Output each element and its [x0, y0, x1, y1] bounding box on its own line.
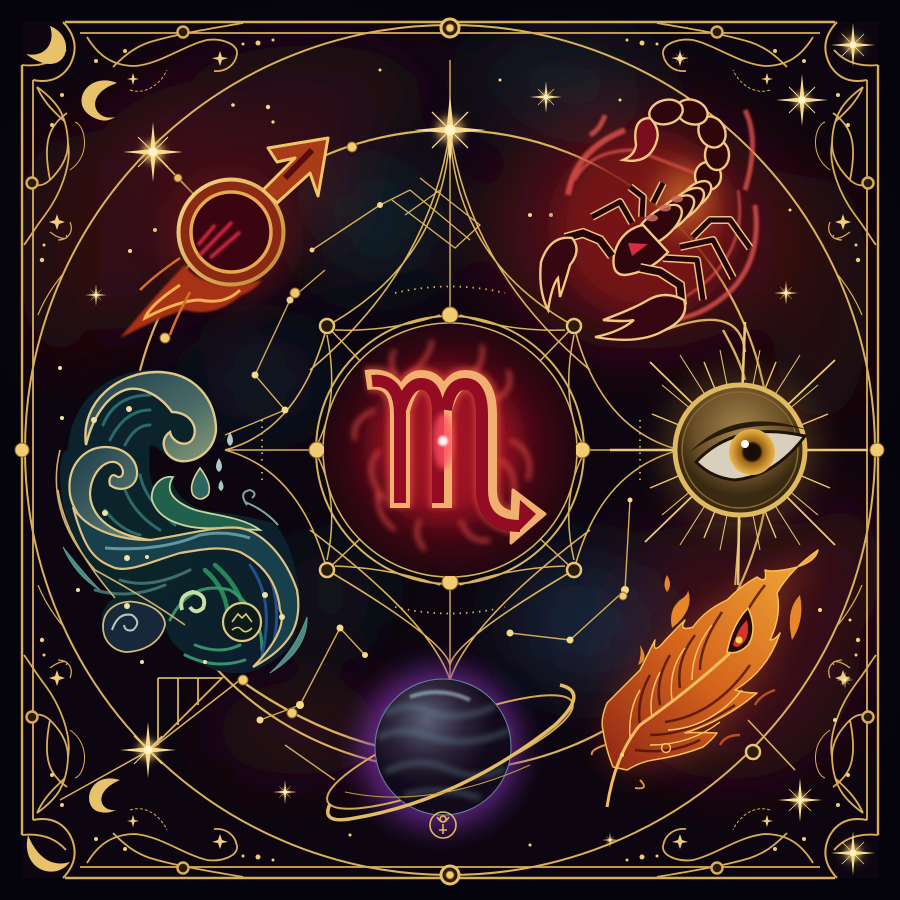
orb [675, 385, 805, 515]
eye in sun [610, 322, 868, 585]
front ring [328, 685, 574, 820]
quill [607, 653, 730, 807]
globe [375, 679, 511, 815]
body highlights [628, 243, 648, 256]
legs [592, 183, 750, 300]
upper claw [540, 233, 612, 310]
side slivers [63, 547, 307, 673]
scorpio glyph [366, 379, 545, 543]
lower claw [595, 268, 685, 340]
lid [690, 421, 808, 452]
iris [729, 429, 775, 475]
moons [26, 26, 120, 872]
second curl [69, 447, 150, 550]
mars symbol [120, 138, 328, 338]
spray dots [58, 366, 285, 664]
frame glints [620, 608, 837, 757]
body [613, 176, 716, 275]
red swirl [568, 110, 756, 320]
swirling water wave [56, 366, 307, 673]
lower curl [181, 592, 204, 611]
flaming feather [592, 550, 818, 807]
glyph spark [433, 413, 453, 469]
central medallion [324, 324, 576, 576]
flames around the glyph [354, 340, 530, 550]
drops [192, 468, 209, 499]
eye white [696, 432, 805, 480]
water symbol [223, 603, 261, 641]
planet with ring [316, 668, 584, 838]
inner strands [95, 395, 277, 664]
arrow [263, 138, 328, 203]
outer contours [56, 450, 185, 625]
ring [184, 185, 278, 279]
water silhouette [60, 370, 300, 673]
back ring [316, 675, 584, 829]
feather veins [635, 585, 765, 751]
stinger [623, 118, 658, 161]
constellation lines and dots [128, 68, 852, 846]
top curl [85, 372, 216, 461]
tail [646, 95, 731, 190]
third curl [152, 477, 260, 530]
sun rays [610, 322, 868, 585]
bottom spiral [103, 602, 165, 652]
pluto symbol [430, 812, 456, 838]
stray flames [638, 575, 801, 665]
comet flame [120, 258, 262, 338]
S band [73, 507, 298, 667]
scorpion [540, 95, 756, 340]
feather eye [727, 608, 753, 653]
